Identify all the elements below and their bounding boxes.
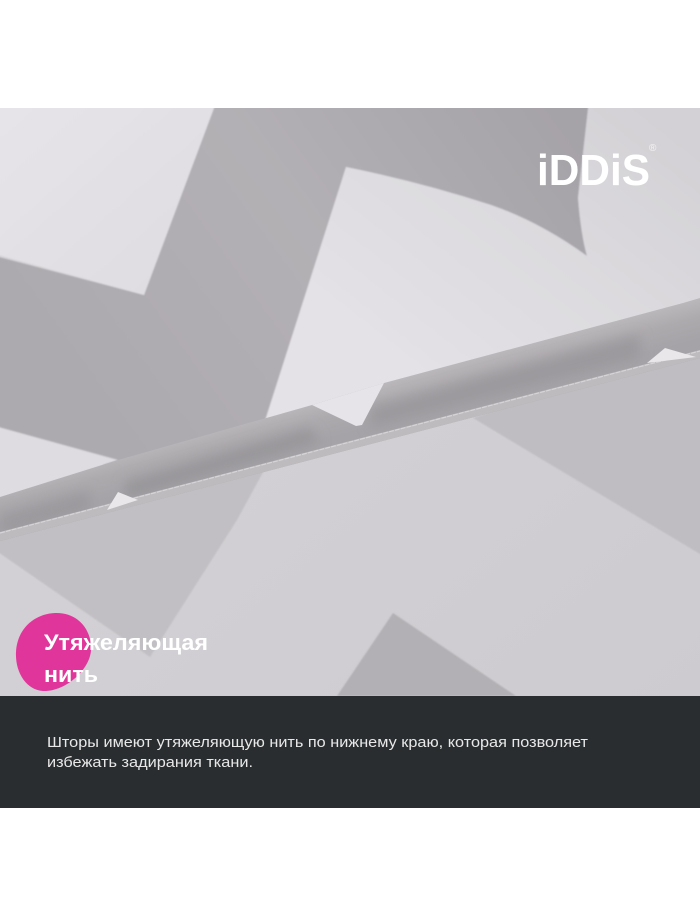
dark caption panel <box>0 696 700 808</box>
hem: folded white patch centre <box>312 383 384 426</box>
caption text: избежать задирания ткани. <box>47 755 253 771</box>
fabric: darker wedge below hem right <box>474 358 700 554</box>
hem: stitch line <box>0 351 700 533</box>
logo: registered mark: ® <box>649 143 657 154</box>
hem: folded white patch right <box>647 348 696 363</box>
heading <box>44 630 208 687</box>
infographic canvas <box>0 108 700 808</box>
fabric: light panel right <box>265 167 700 418</box>
hem: lower strip below stitch <box>0 350 700 541</box>
heading: нить <box>44 662 98 687</box>
heading: Утяжеляющая <box>44 630 208 655</box>
fabric: dark triangle bottom <box>337 613 516 696</box>
caption text <box>47 735 588 771</box>
fabric: light panel top left <box>0 100 217 295</box>
hem: folded white patch left <box>107 492 138 510</box>
fabric: light wedge left <box>0 426 118 500</box>
logo: iDDiS: iDDiS <box>537 146 650 195</box>
photo: curtain fabric close-up <box>0 100 700 696</box>
caption text: Шторы имеют утяжеляющую нить по нижнему краю, которая позволяет <box>47 735 588 751</box>
fabric: grey chevron band <box>0 100 589 470</box>
pink blob accent <box>16 613 91 691</box>
hem: weighted thread fold <box>0 298 700 541</box>
fabric: darker wedge below hem left <box>0 465 267 657</box>
hem: dark shadow patches <box>0 335 640 535</box>
